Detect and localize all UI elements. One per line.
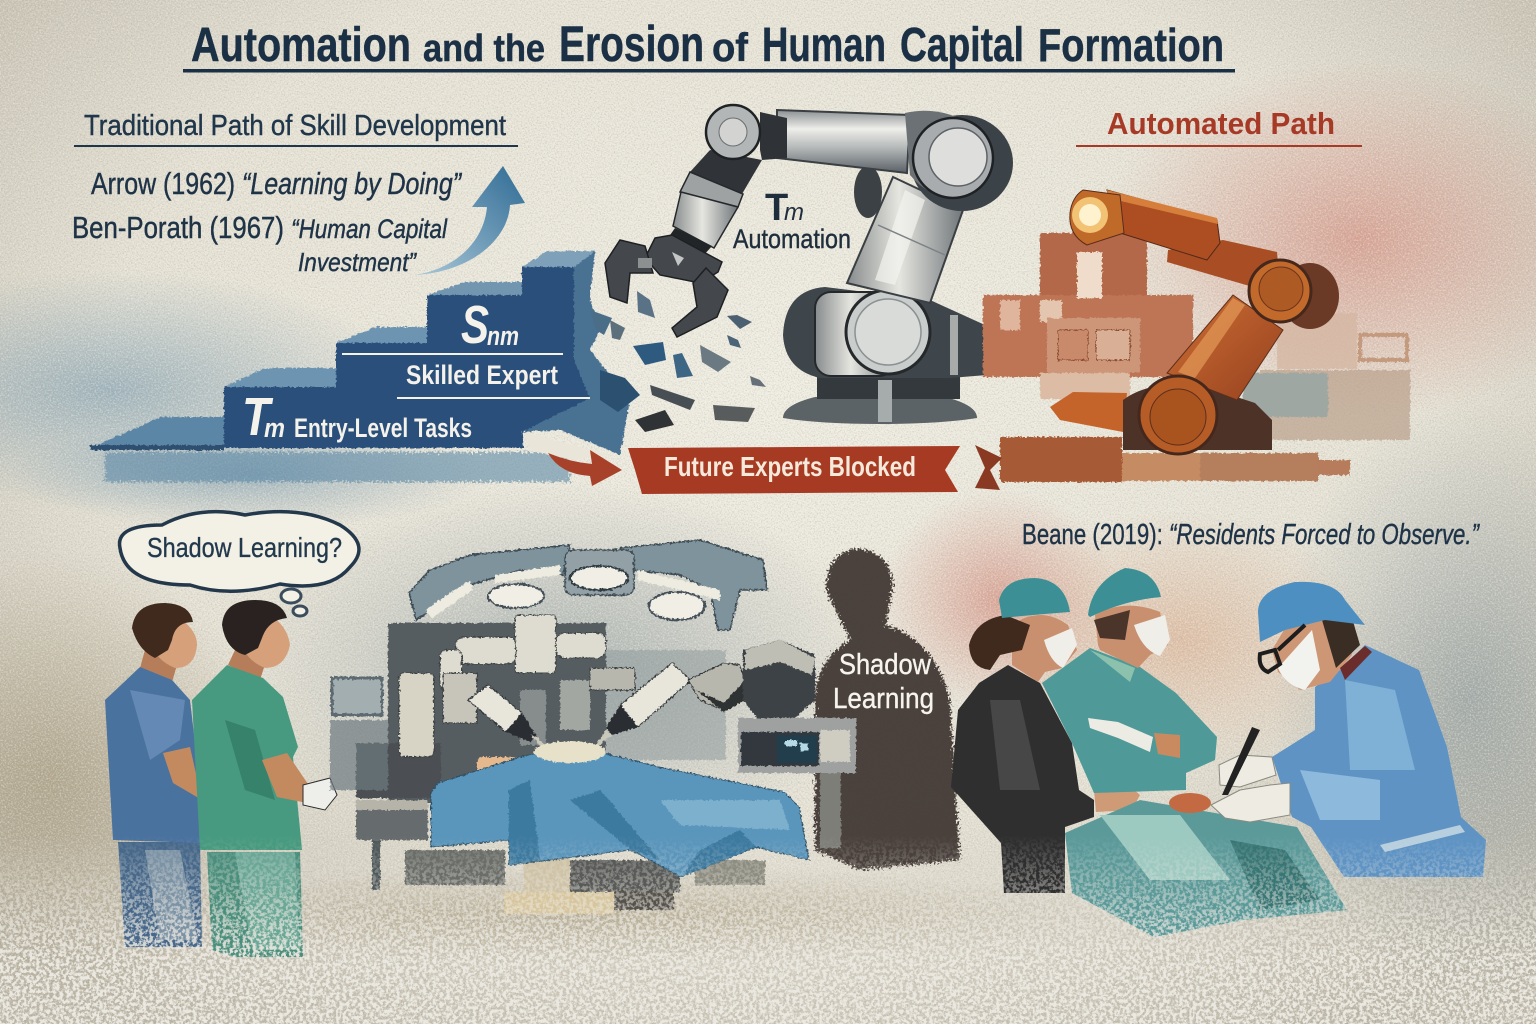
step labels: S: [461, 295, 489, 355]
thought bubble: Shadow Learning?: [147, 532, 342, 563]
broken stair rubble: [590, 291, 766, 432]
students: [105, 600, 337, 957]
step labels: m: [264, 413, 285, 443]
dissolving speckle at figure bottoms: [0, 841, 1536, 1024]
wrist: [668, 105, 787, 256]
patient skin: [477, 757, 519, 781]
title: Erosion: [559, 16, 704, 72]
student in green scrubs: [192, 600, 337, 957]
instrument arms: [468, 663, 745, 754]
robot lamp head: [1070, 190, 1124, 245]
elbow rear housing: [854, 166, 882, 218]
resident in black: [951, 578, 1140, 893]
step labels: nm: [487, 321, 519, 351]
heading: traditional path: Traditional Path of Skill Development: [84, 110, 506, 142]
step labels: [242, 295, 590, 447]
thought bubble: [120, 512, 359, 616]
step labels: T: [242, 387, 273, 447]
heading: automated path: Automated Path: [1107, 106, 1335, 141]
label: Tm automation: m: [784, 199, 804, 226]
title: of: [712, 26, 749, 70]
title: Human: [762, 19, 886, 72]
patient drape: [431, 741, 809, 877]
forearm: [1107, 190, 1220, 260]
gripper: [605, 235, 728, 337]
overhead light arcs: [409, 540, 767, 630]
title: Automation: [191, 19, 411, 72]
step labels: Entry-Level Tasks: [294, 413, 472, 443]
arrow: rising skill curve: [415, 166, 525, 275]
patient drape green: [1065, 793, 1347, 937]
robot base: [783, 287, 987, 424]
rear elbow: [1281, 263, 1339, 329]
label: Tm automation: [733, 187, 851, 254]
left bench: [356, 800, 505, 890]
upper arm: [1167, 295, 1283, 400]
orange robot arm: [1000, 190, 1350, 482]
surgeons: [951, 568, 1486, 937]
forearm: [777, 110, 910, 173]
title: Formation: [1038, 19, 1224, 71]
silver robot arm: [605, 105, 1013, 424]
label: shadow learning: Shadow: [839, 649, 932, 681]
title: [183, 16, 1235, 72]
citations: [72, 166, 462, 277]
lead surgeon: [1211, 582, 1486, 877]
side cart: [738, 640, 856, 848]
banner: future experts blocked: [628, 445, 1002, 494]
staircase of skill development: [90, 251, 630, 460]
step labels: Skilled Expert: [406, 360, 558, 390]
robot white columns: [399, 615, 635, 757]
citations: Investment”: [298, 247, 417, 277]
resident in teal: [1042, 568, 1217, 793]
orange foot: [1050, 392, 1127, 432]
title: Capital: [900, 19, 1024, 72]
linking segment: [1167, 240, 1280, 290]
label: Tm automation: Automation: [733, 224, 851, 254]
table base: [504, 857, 765, 914]
elbow joint: [905, 111, 1013, 211]
upper arm: [847, 177, 963, 303]
rust floor blocks: [1000, 437, 1350, 482]
haze band under stairs: [105, 452, 570, 482]
citations: Ben-Porath (1967) “Human Capital: [72, 210, 448, 245]
label: shadow learning: [833, 649, 934, 715]
blocky factory background: [983, 233, 1410, 440]
base joint: [1139, 376, 1217, 454]
label: shadow learning: Learning: [833, 683, 934, 715]
housing: [1123, 384, 1272, 450]
elbow joint: [1249, 260, 1311, 322]
banner: future experts blocked: Future Experts Blocked: [664, 451, 916, 482]
citations: Arrow (1962) “Learning by Doing”: [91, 166, 462, 201]
title: and the: [423, 28, 545, 70]
surgical robot: [330, 540, 856, 914]
label: Tm automation: T: [765, 187, 788, 229]
robot tower backdrop: [330, 623, 726, 803]
small red arrow: [548, 450, 622, 486]
shadow silhouette: [815, 549, 960, 870]
student in blue scrubs: [105, 603, 202, 947]
